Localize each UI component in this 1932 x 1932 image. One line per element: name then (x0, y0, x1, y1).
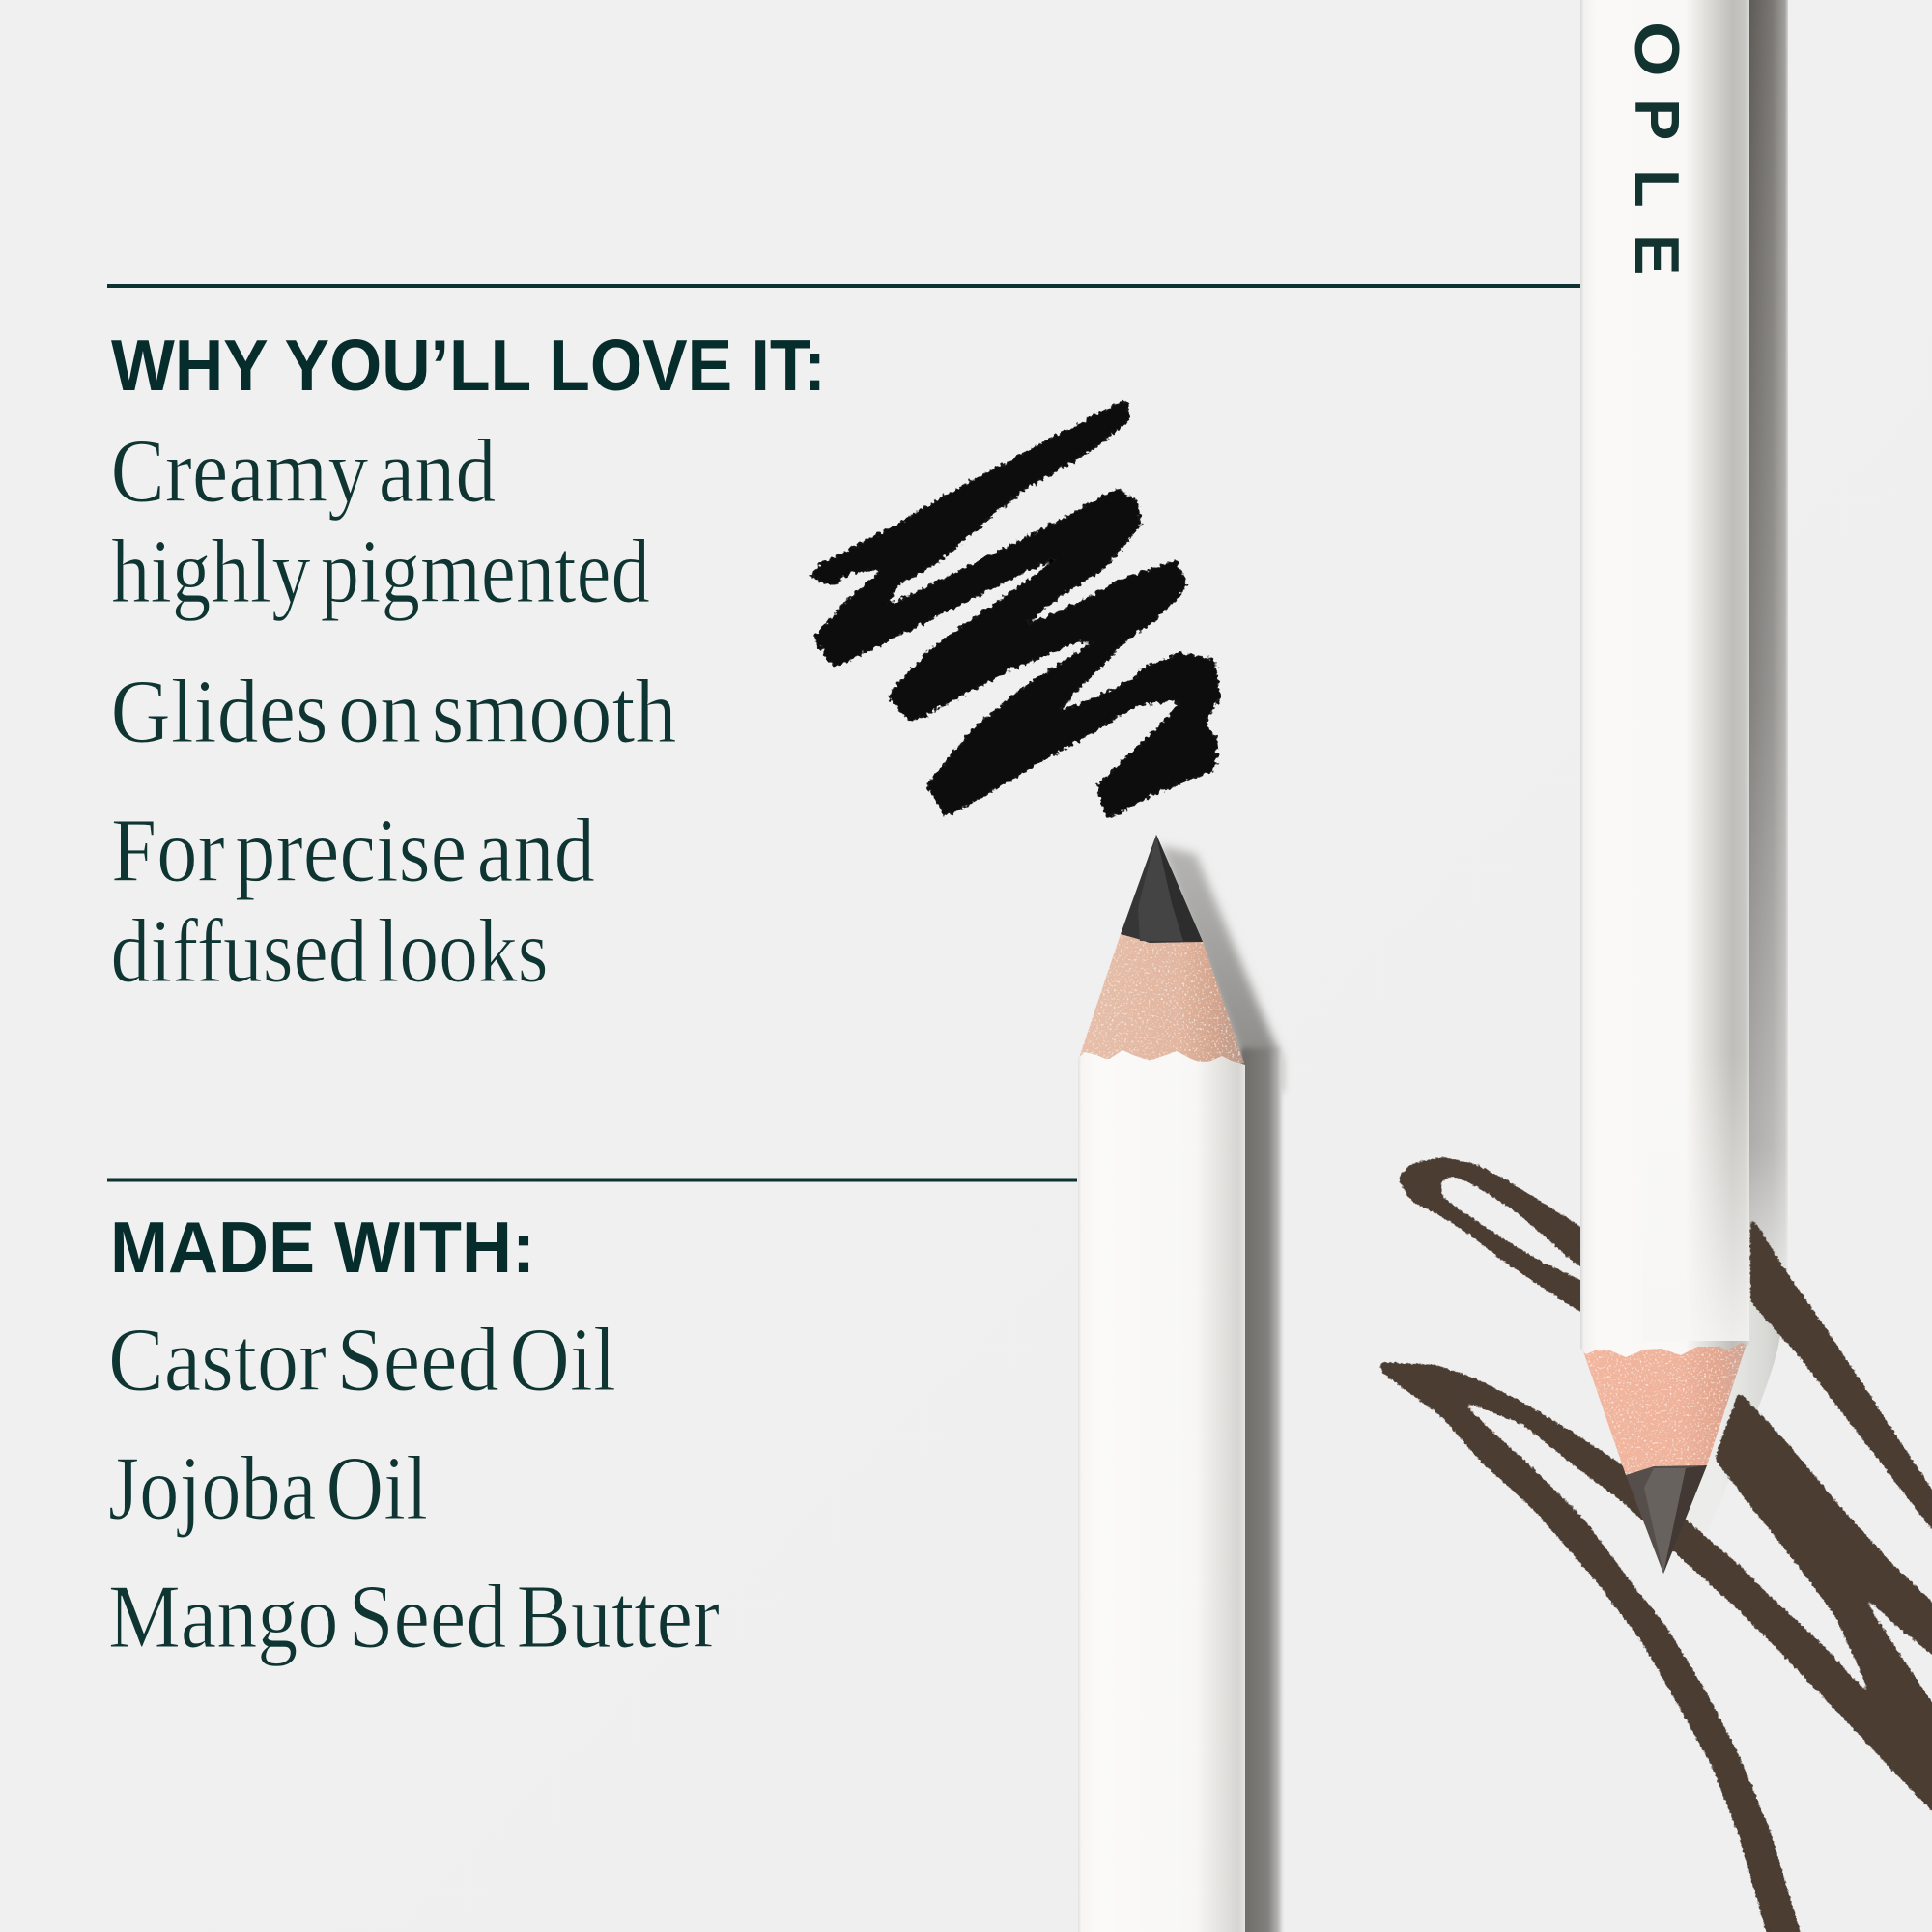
shadow: right pencil (1681, 0, 1790, 1532)
benefit: for precise and diffused looks (110, 801, 595, 1002)
ingredient: jojoba oil: Jojoba Oil (108, 1438, 428, 1539)
barrel highlight near the tip (1642, 1053, 1749, 1341)
ingredient: castor seed oil: Castor Seed Oil (108, 1310, 616, 1410)
pencil white barrel (1078, 1050, 1245, 1932)
brand lettering on barrel: O (1622, 21, 1692, 77)
brand lettering on barrel (1622, 21, 1692, 275)
section: made with (108, 1207, 720, 1667)
benefit: glides on smooth: Glides on smooth (110, 662, 676, 762)
swatch loop, upper left (1398, 1157, 1584, 1315)
rule above why you'll love it (107, 284, 1580, 288)
pencil wood tip (1079, 934, 1244, 1063)
swatch wide band with branch (1715, 1391, 1932, 1816)
benefit: creamy and highly pigmented: highly pigmented (111, 522, 650, 622)
pencil wood tip (1582, 1341, 1747, 1475)
brown pencil swatch (1378, 1157, 1932, 1932)
ingredient: mango seed butter: Mango Seed Butter (108, 1567, 720, 1667)
shadow: centre pencil (1154, 831, 1294, 1932)
section: why you'll love it (110, 325, 826, 1002)
heading: why you'll love it: WHY YOU’LL LOVE IT: (111, 325, 826, 406)
pencil lead (1626, 1465, 1707, 1574)
rule above made with (107, 1179, 1077, 1182)
benefit: creamy and highly pigmented (110, 421, 650, 622)
swatch right band behind pencil (1750, 1214, 1932, 1536)
right brown pencil (1580, 0, 1749, 1574)
benefit: for precise and diffused looks: diffused looks (110, 901, 549, 1002)
swatch lower curve (1384, 1375, 1802, 1932)
pencil white barrel (1580, 0, 1749, 1357)
benefit: for precise and diffused looks: For precise and (111, 801, 595, 901)
brand lettering on barrel: PLE (1622, 99, 1692, 275)
centre black pencil (1078, 835, 1245, 1932)
swatch upper curve (1378, 1362, 1932, 1816)
pencil lead (1121, 835, 1203, 943)
heading: made with: MADE WITH: (110, 1207, 535, 1288)
black pencil swatch (811, 401, 1219, 818)
benefit: creamy and highly pigmented: Creamy and (110, 421, 497, 522)
